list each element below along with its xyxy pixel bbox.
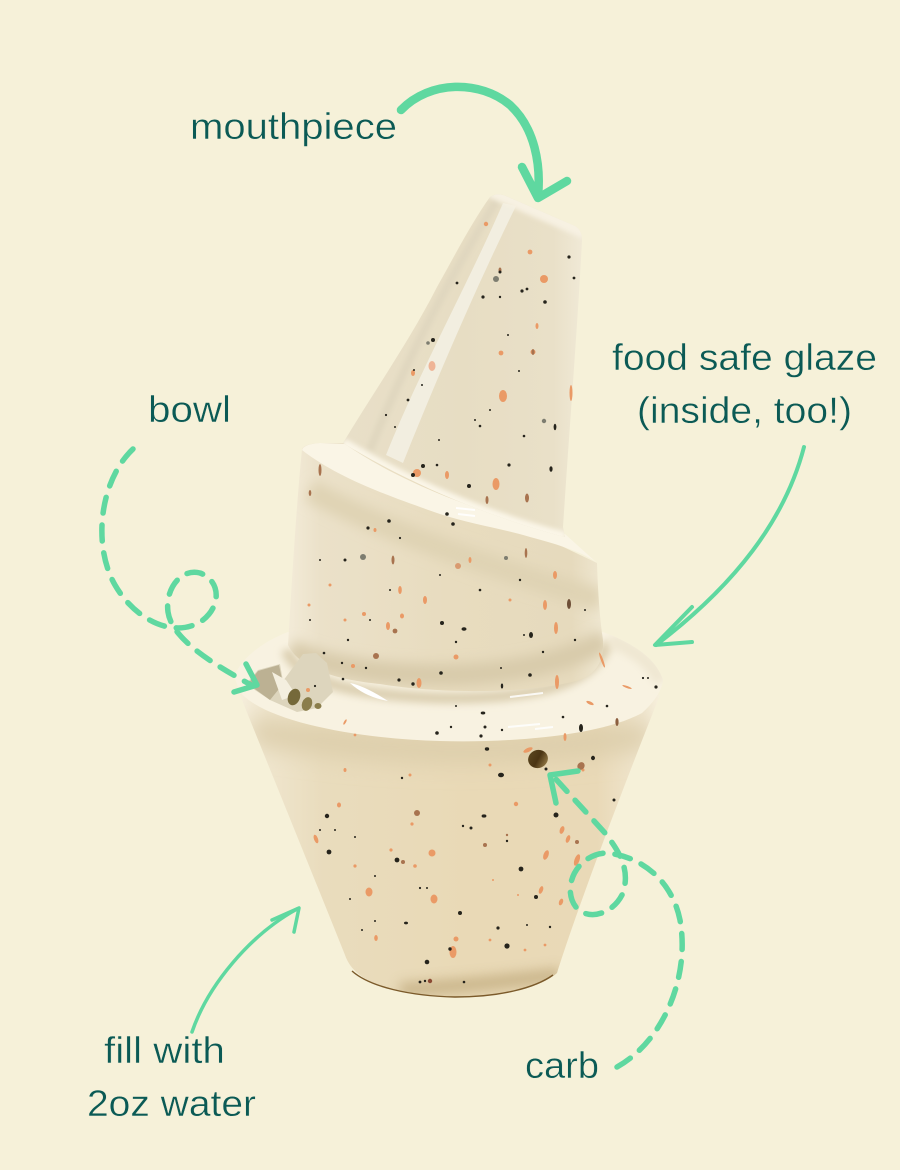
carb hole [526, 747, 550, 771]
bowl opening [246, 653, 388, 712]
ceramic piece [234, 190, 663, 997]
label: carb: carb [525, 1045, 599, 1086]
label: fill with 2oz water [87, 1030, 256, 1124]
flange [234, 632, 663, 741]
glaze highlights [456, 508, 553, 729]
label: mouthpiece: mouthpiece [190, 106, 397, 147]
lower body [238, 690, 660, 997]
speckles: black [309, 255, 658, 983]
label: fill with 2oz water: 2oz water [87, 1083, 256, 1124]
label: bowl: bowl [148, 389, 231, 430]
middle section [288, 443, 605, 691]
arrow: bowl [102, 449, 257, 692]
arrow: carb [550, 771, 682, 1067]
speckles: grey [360, 276, 546, 560]
arrow: food safe glaze [655, 447, 804, 645]
speckles: orange [306, 222, 632, 958]
top cone mouthpiece [343, 190, 585, 537]
label: food safe glaze: food safe glaze [612, 337, 877, 378]
lip highlight [302, 443, 597, 563]
label: fill with 2oz water: fill with [104, 1030, 225, 1071]
arrow: fill with water [192, 908, 299, 1032]
label: food safe glaze [612, 337, 877, 431]
label: food safe glaze: (inside, too!) [637, 390, 852, 431]
arrow: mouthpiece [401, 87, 567, 198]
speckles: brown [309, 268, 619, 983]
